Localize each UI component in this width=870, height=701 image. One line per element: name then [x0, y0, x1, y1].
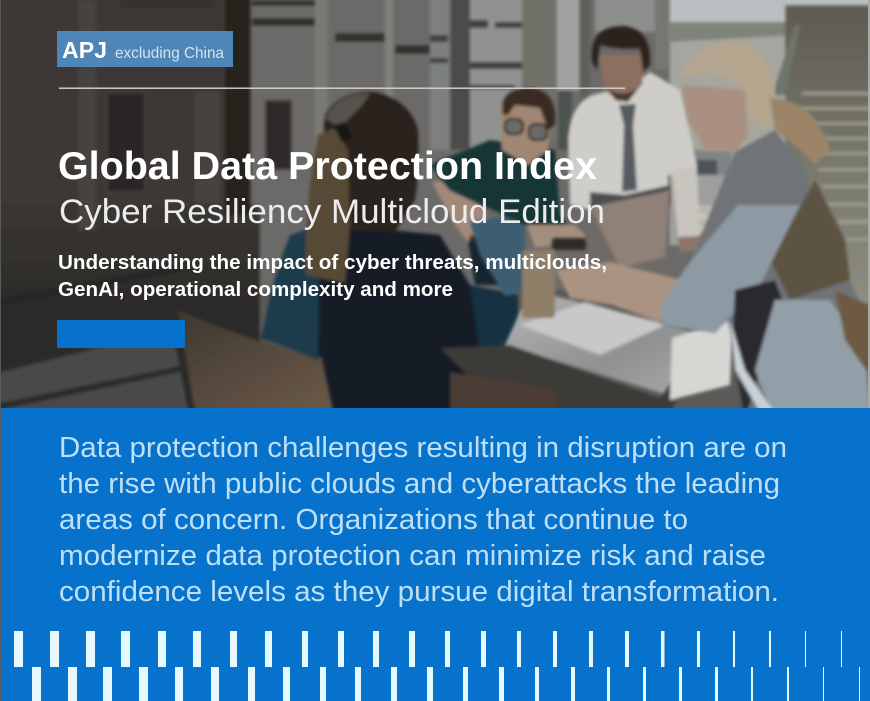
decorative barcode stripes: [14, 631, 860, 701]
tagline: [58, 252, 607, 301]
left edge line: [0, 0, 1, 701]
seated man with glasses: [430, 88, 590, 248]
table with papers and coffee cups: [440, 238, 733, 420]
staircase: [785, 5, 870, 305]
intro paragraph: modernize data protection can minimize risk and raise: [59, 540, 766, 572]
intro paragraph: areas of concern. Organizations that continue to: [59, 504, 688, 536]
region tag: APJ excluding China: [57, 31, 233, 67]
far left floor: [1, 348, 189, 408]
header divider line: [59, 88, 625, 89]
tagline: Understanding the impact of cyber threats, multiclouds,: [58, 252, 607, 274]
wooden chair: [178, 310, 332, 408]
blonde woman in grey shirt: [660, 41, 870, 420]
title: Global Data Protection Index: [58, 145, 597, 188]
tablet on the table: [470, 212, 525, 296]
region tag: APJ excluding China: APJ: [62, 37, 107, 63]
intro paragraph: confidence levels as they pursue digital transformation.: [59, 576, 779, 608]
subtitle: Cyber Resiliency Multicloud Edition: [59, 193, 605, 231]
woman from behind with ponytail: [260, 92, 518, 420]
blue button block: [57, 320, 185, 348]
hand and forearm: [556, 262, 690, 322]
raised hand and forearm: [432, 180, 488, 244]
region tag: APJ excluding China: excluding China: [115, 45, 224, 62]
photo edge lines: [868, 0, 870, 408]
standing man in white shirt and tie: [568, 26, 718, 252]
intro paragraph: Data protection challenges resulting in disruption are on: [59, 432, 787, 464]
tagline: GenAI, operational complexity and more: [58, 279, 453, 301]
header photo: team meeting around a table: [0, 0, 870, 420]
intro paragraph: [59, 432, 787, 608]
bright far wall and skylight: [668, 34, 788, 246]
sunlit floor: [698, 204, 713, 235]
office background wall and windows: [0, 0, 870, 420]
window blinds and pillars: [430, 0, 450, 150]
laptop on the table: [585, 190, 670, 272]
intro paragraph: the rise with public clouds and cyberattacks the leading: [59, 468, 780, 500]
